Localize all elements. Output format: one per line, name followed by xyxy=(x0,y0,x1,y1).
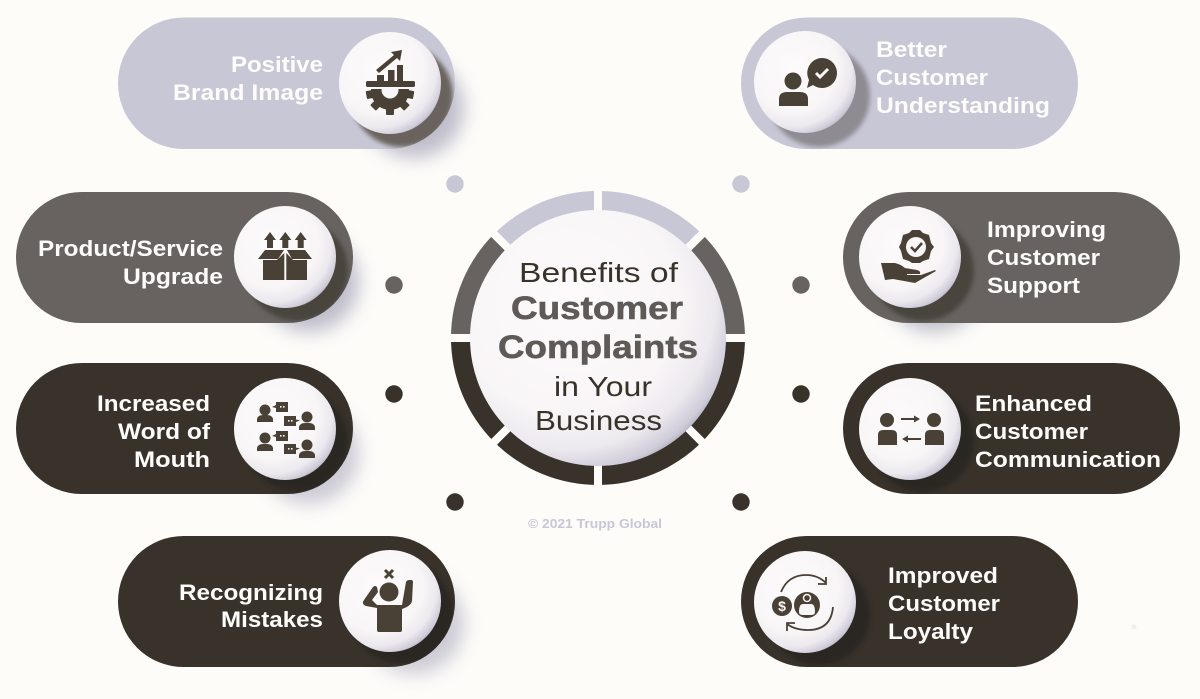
label: Improved Customer Loyalty: Loyalty xyxy=(888,619,974,644)
central segmented ring xyxy=(445,185,751,491)
icon: money and customer cycle: $ xyxy=(778,598,786,614)
icon: people talking xyxy=(257,402,315,458)
label: Better Customer Understanding xyxy=(876,37,1050,118)
panel: Better Customer Understanding xyxy=(741,18,1078,149)
title: Benefits of xyxy=(519,257,678,288)
label: Increased Word of Mouth: Word of xyxy=(118,419,211,444)
label: Improving Customer Support: Improving xyxy=(987,217,1106,242)
label: Better Customer Understanding: Better xyxy=(876,37,947,62)
icon: box with upward arrows xyxy=(258,232,312,280)
label: Positive Brand Image xyxy=(173,52,323,105)
icon: money and customer cycle xyxy=(772,575,833,631)
copyright: © 2021 Trupp Global xyxy=(528,517,662,531)
label: Enhanced Customer Communication xyxy=(975,391,1161,472)
label: Improving Customer Support xyxy=(987,217,1106,298)
panel: Increased Word of Mouth xyxy=(16,363,359,504)
panel: Enhanced Customer Communication xyxy=(843,363,1180,494)
panel: Recognizing Mistakes xyxy=(118,536,464,674)
panel: Product/Service Upgrade xyxy=(16,192,359,332)
label: Recognizing Mistakes: Recognizing xyxy=(179,580,323,605)
label: Recognizing Mistakes: Mistakes xyxy=(221,607,323,632)
label: Enhanced Customer Communication: Communication xyxy=(975,447,1161,472)
panel: Positive Brand Image xyxy=(118,18,464,158)
icon: chart and gear xyxy=(366,50,415,115)
label: Enhanced Customer Communication: Enhanced xyxy=(975,391,1092,416)
label: Positive Brand Image: Positive xyxy=(231,52,323,77)
label: Better Customer Understanding: Understanding xyxy=(876,93,1050,118)
panel: Improving Customer Support xyxy=(843,192,1180,332)
label: Increased Word of Mouth xyxy=(97,391,211,472)
label: Product/Service Upgrade xyxy=(38,236,223,289)
title: in Your xyxy=(554,371,652,402)
label: Enhanced Customer Communication: Customer xyxy=(975,419,1088,444)
panel: Improved Customer Loyalty xyxy=(741,536,1078,667)
title xyxy=(498,257,698,436)
label: Positive Brand Image: Brand Image xyxy=(173,80,323,105)
label: Improved Customer Loyalty: Customer xyxy=(888,591,1000,616)
title: Complaints xyxy=(498,329,698,365)
label: Improved Customer Loyalty xyxy=(888,563,1000,644)
title: Business xyxy=(535,405,662,436)
icon: two people exchanging arrows xyxy=(878,413,944,445)
label: Recognizing Mistakes xyxy=(179,580,323,632)
label: Product/Service Upgrade: Product/Service xyxy=(38,236,223,261)
label: Better Customer Understanding: Customer xyxy=(876,65,988,90)
central sphere xyxy=(470,210,726,466)
connector dots xyxy=(385,175,810,511)
title: Customer xyxy=(511,290,683,326)
icon: person with check speech bubble xyxy=(779,58,837,106)
icon: person with cross mark xyxy=(363,570,413,632)
label: Improving Customer Support: Support xyxy=(987,273,1081,298)
icon: hand holding badge xyxy=(881,230,936,283)
label: Increased Word of Mouth: Increased xyxy=(97,391,210,416)
label: Product/Service Upgrade: Upgrade xyxy=(123,264,223,289)
label: Improving Customer Support: Customer xyxy=(987,245,1100,270)
label: Improved Customer Loyalty: Improved xyxy=(888,563,998,588)
label: Increased Word of Mouth: Mouth xyxy=(134,447,210,472)
